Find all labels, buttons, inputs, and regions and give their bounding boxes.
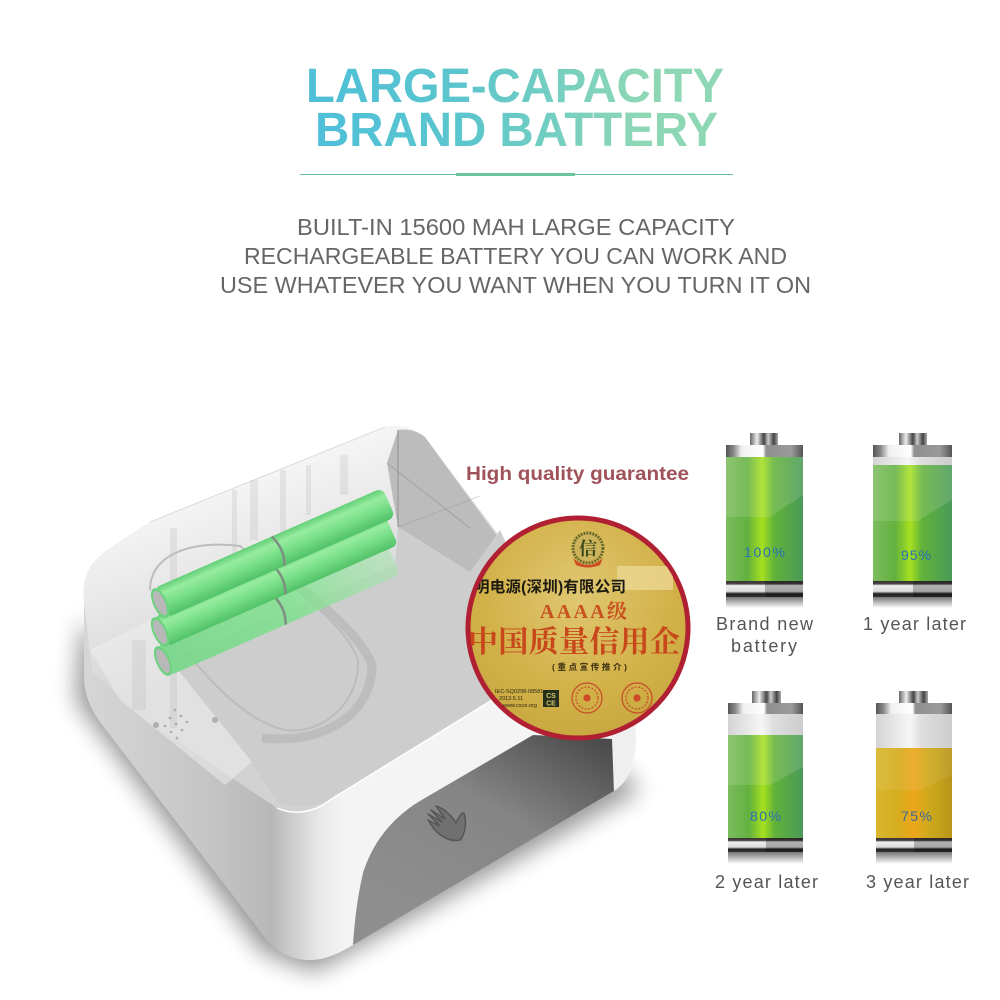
CSCE logo: CS <box>546 693 556 700</box>
label: 3 year later: 3 year later <box>866 872 969 892</box>
battery: 3 year later 75%: 75% <box>901 808 932 824</box>
label: 2 year later: 2 year later <box>715 872 818 892</box>
lid vertical reflections <box>132 455 348 728</box>
icon: hand sensor <box>428 806 465 841</box>
certificate number: 2013.5.11 <box>499 696 523 702</box>
battery: brand new 100%: 100% <box>744 544 785 560</box>
title <box>306 60 724 157</box>
battery cell 3 <box>150 545 400 678</box>
label: 1 year later: 1 year later <box>863 614 966 634</box>
certificate number: IEC-SQ0298-08581 <box>495 689 543 695</box>
wall seam lines <box>150 427 480 528</box>
description text: BUILT-IN 15600 MAH LARGE CAPACITY <box>297 214 735 240</box>
battery cell 1 <box>147 488 395 620</box>
battery: 1 year later 95% <box>873 433 952 608</box>
certificate number: www.csce.org <box>502 703 537 709</box>
certificate heading: 中国质量信用企 <box>468 626 680 659</box>
company name: 明电源(深圳)有限公司 <box>474 578 626 596</box>
battery: 3 year later 75% <box>876 691 952 864</box>
red stamps <box>572 683 652 713</box>
seal: certificate medallion <box>468 518 688 738</box>
inner floor <box>170 527 560 806</box>
device: transparent nail lamp with batteries <box>76 426 640 972</box>
label: brand new battery <box>716 614 814 656</box>
oval lamp recess <box>150 545 372 739</box>
certificate number <box>495 689 543 709</box>
light interior panel <box>90 620 252 785</box>
battery cell 2 <box>147 516 398 649</box>
battery: 2 year later 80% <box>728 691 803 864</box>
certificate emblem: 信 <box>579 538 597 559</box>
battery: 1 year later 95%: 95% <box>901 547 931 563</box>
device body <box>84 426 636 960</box>
description text <box>220 214 811 298</box>
certificate highlight <box>617 566 673 590</box>
inner back wall <box>387 429 500 572</box>
description text: USE WHATEVER YOU WANT WHEN YOU TURN IT ON <box>220 272 811 298</box>
device top face <box>84 426 540 812</box>
certificate emblem <box>573 533 603 568</box>
label: brand new battery: Brand new <box>716 614 814 634</box>
label: brand new battery: battery <box>731 636 797 656</box>
battery: brand new 100% <box>726 433 803 608</box>
gray lamp opening <box>353 735 614 945</box>
certificate note: (重点宣传推介) <box>552 662 627 672</box>
right pillar <box>612 725 635 791</box>
front rim highlight <box>277 700 492 812</box>
battery: 2 year later 80%: 80% <box>750 808 781 824</box>
circuit board details <box>153 709 218 739</box>
CSCE logo: CE <box>546 700 556 708</box>
AAAA grade: AAAA级 <box>540 600 627 623</box>
title: BRAND BATTERY <box>315 104 718 157</box>
CSCE logo <box>543 690 559 708</box>
caption: high quality guarantee: High quality guarantee <box>466 463 689 485</box>
device shadow <box>76 620 640 972</box>
battery pack <box>147 488 400 678</box>
description text: RECHARGEABLE BATTERY YOU CAN WORK AND <box>244 243 787 269</box>
title divider <box>300 173 733 176</box>
title: LARGE-CAPACITY <box>306 60 724 113</box>
